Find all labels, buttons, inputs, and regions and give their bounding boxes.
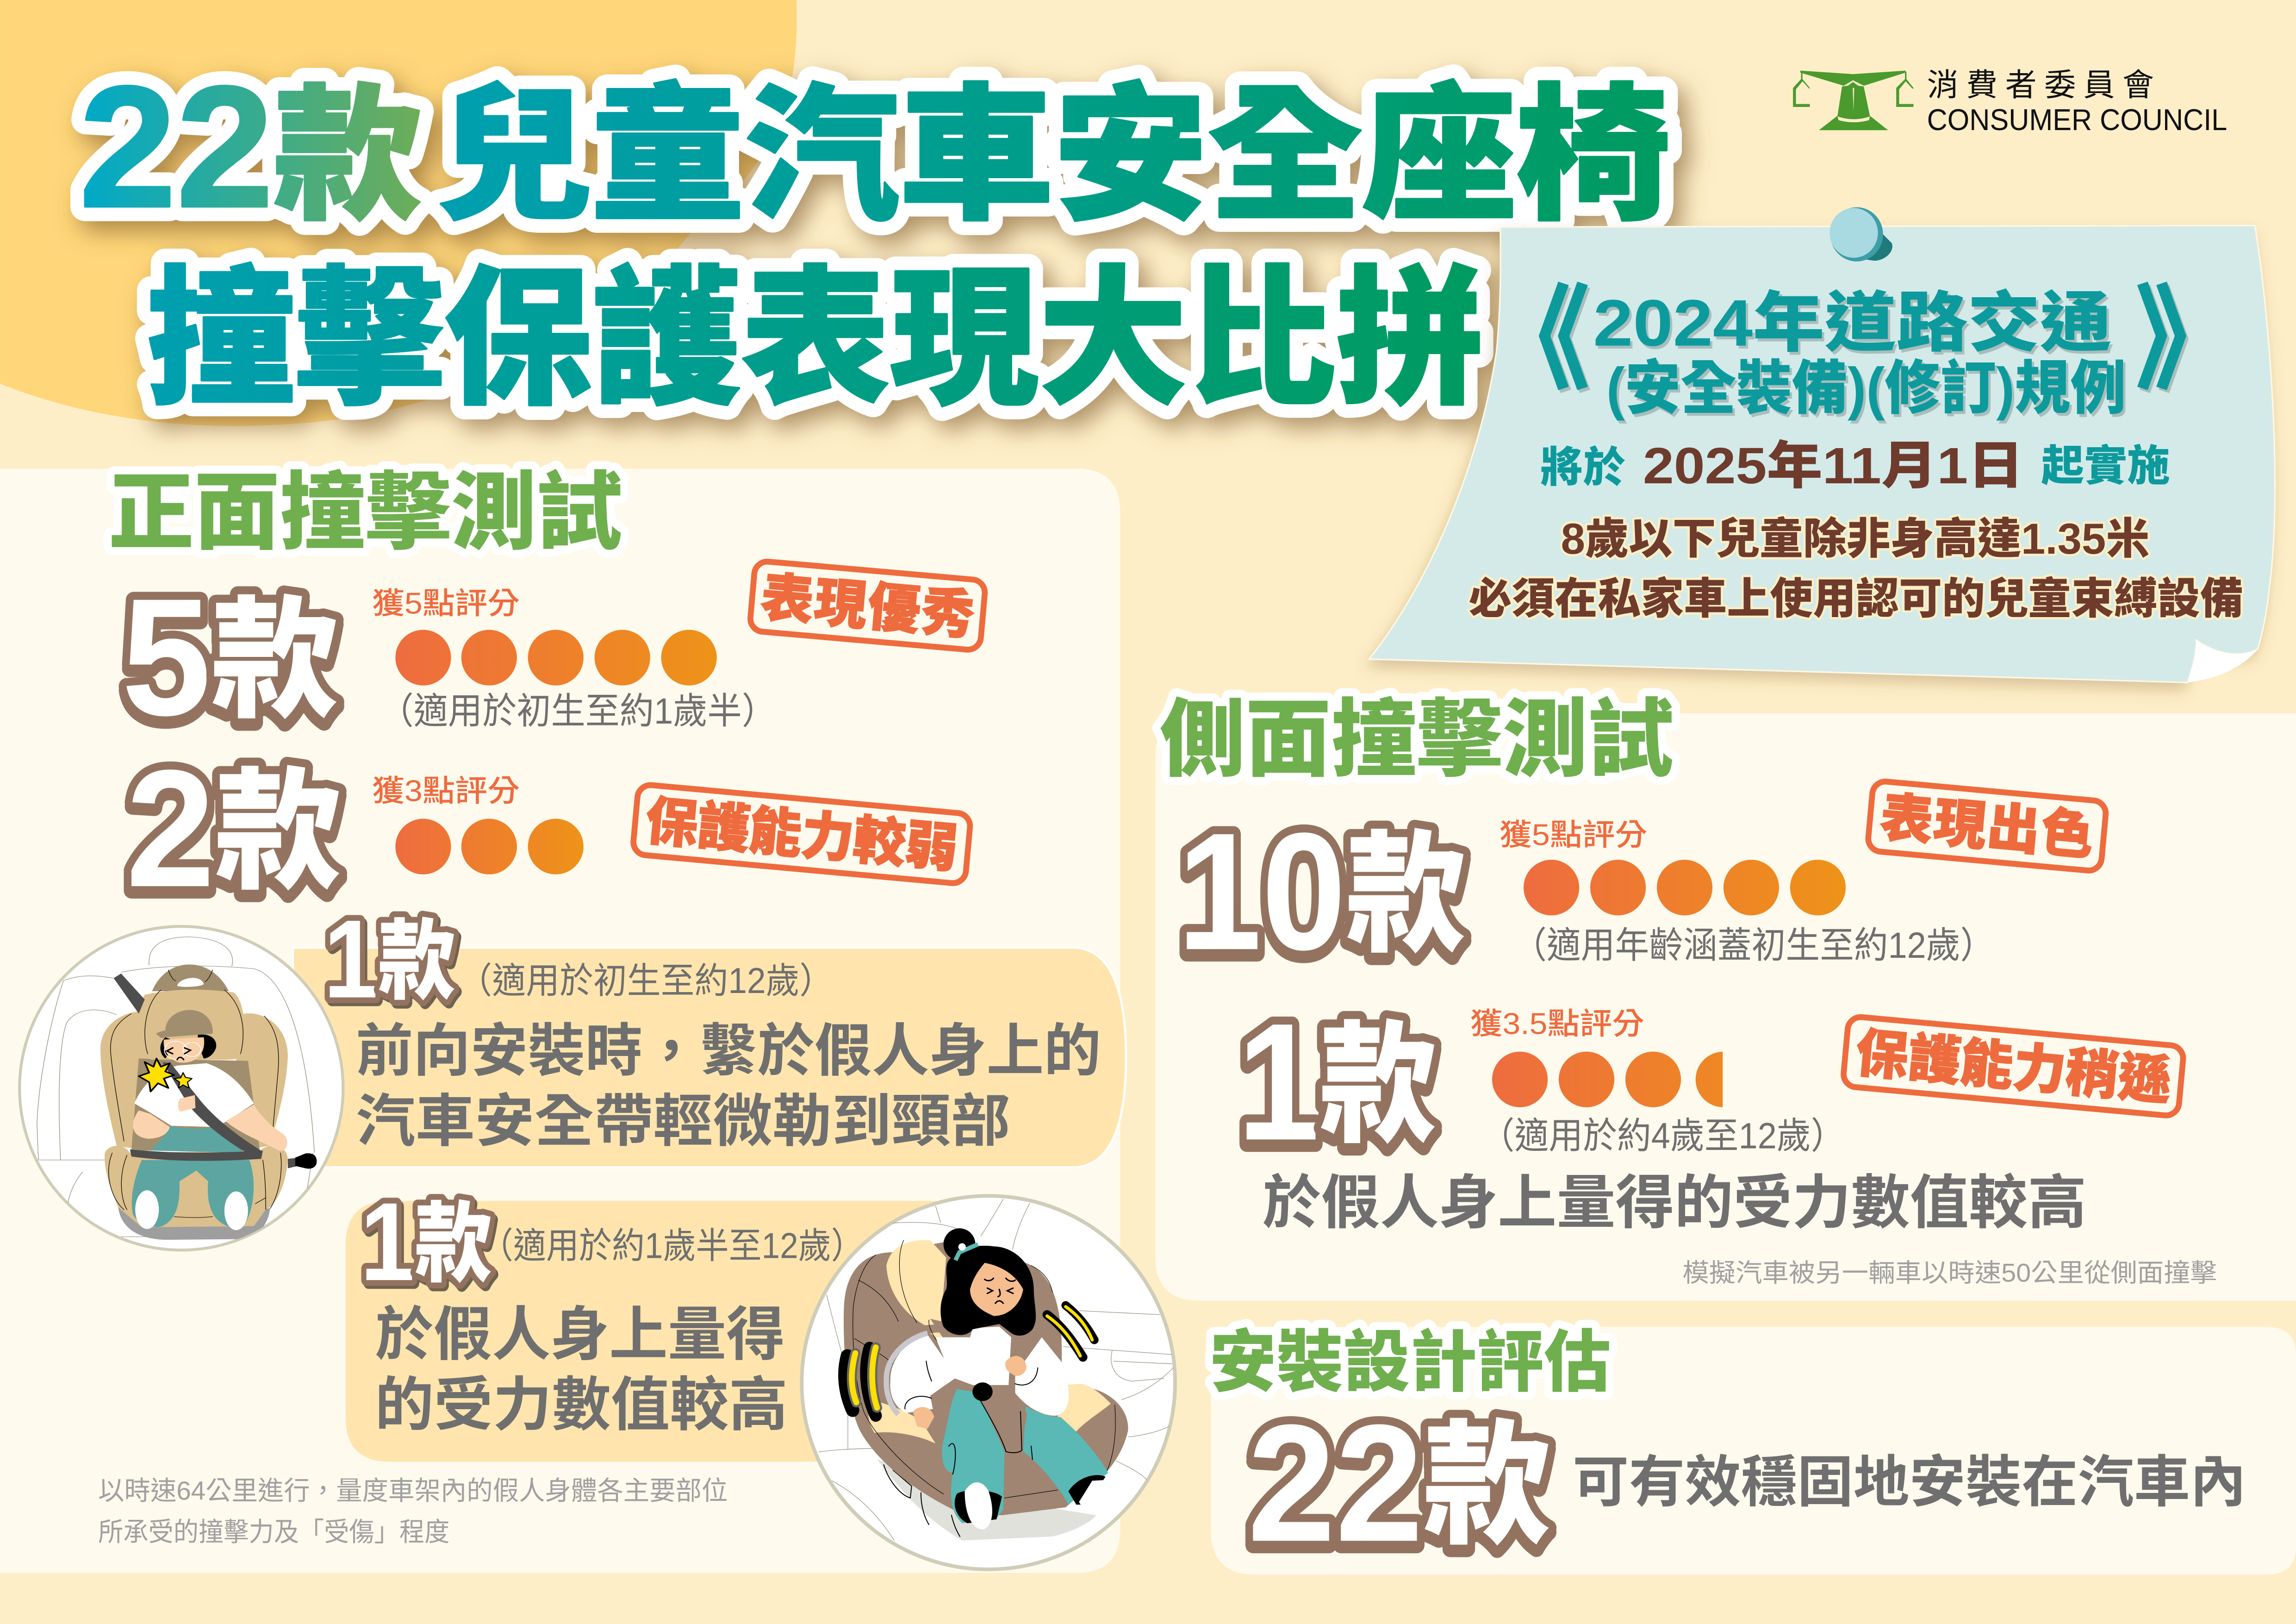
car seat outline	[37, 937, 314, 1237]
hands	[1005, 1356, 1027, 1376]
age range 1.5-12y: （適用於約1歲半至12歲）	[480, 1226, 864, 1266]
stamp: excellent: 表現優秀	[759, 568, 977, 645]
harness lower	[978, 1385, 1027, 1453]
stamp: slightly inferior: 保護能力稍遜	[1853, 1024, 2173, 1111]
effective date line: 2025年11月1日	[1643, 437, 2023, 494]
title white outline and shadow: 22款	[79, 50, 422, 244]
rating dots 3	[395, 819, 584, 874]
seat shell	[844, 1242, 1128, 1515]
grey shadow	[886, 1333, 927, 1414]
footnote: frontal test	[98, 1476, 728, 1547]
panel: regulation note	[1369, 207, 2275, 682]
rating dots 3.5	[1492, 1052, 1751, 1107]
callout band: force reading	[346, 1201, 966, 1462]
count: 5 models: 款	[211, 587, 338, 734]
stamp: weaker protection: 保護能力較弱	[643, 792, 960, 879]
title white outline and shadow	[79, 50, 1671, 423]
logo chinese name: 消費者委員會	[1927, 68, 2154, 103]
illustration circle	[802, 1196, 1175, 1569]
shoulder belt	[114, 974, 145, 1014]
count: 10 models: 款	[1346, 821, 1466, 968]
count: 1 model front-facing: 1	[324, 897, 378, 1021]
footnote: frontal test: 以時速64公里進行，量度車架內的假人身體各主要部位	[98, 1476, 728, 1506]
illustration circle	[19, 926, 343, 1250]
yellow side panels	[868, 1401, 935, 1443]
rating dots 5	[395, 630, 717, 686]
belt finding text: 前向安裝時，繫於假人身上的	[356, 1019, 1101, 1083]
score label 3.5: 獲3.5點評分	[1470, 1007, 1644, 1041]
face	[970, 1263, 1023, 1316]
effective date line	[1540, 437, 2170, 494]
count: 22 models: 22	[1248, 1390, 1423, 1576]
impact marks	[845, 1305, 1095, 1416]
panel: side impact background	[1155, 713, 2296, 1300]
panel: side impact test	[1160, 692, 2217, 1287]
trousers	[150, 1126, 245, 1153]
stamp: outstanding: 表現出色	[1878, 788, 2096, 866]
regulation name line two: (安全裝備)(修訂)規例	[1606, 356, 2126, 421]
hair	[160, 1035, 216, 1058]
belt finding text: 汽車安全帶輕微勒到頸部	[356, 1090, 1010, 1154]
impact stars	[139, 1058, 174, 1092]
title line two: 撞擊保護表現大比拼	[146, 256, 1485, 423]
title line one	[79, 50, 1671, 244]
illustration: child in reclined seat	[802, 1196, 1175, 1569]
force finding text: 於假人身上量得	[375, 1301, 785, 1367]
hair	[940, 1246, 1036, 1336]
note curled corner	[2188, 640, 2258, 682]
count: 5 models: 5	[122, 564, 211, 750]
force finding text	[375, 1301, 788, 1437]
note opening bracket: 《	[1485, 276, 1590, 404]
floor shadow	[877, 1460, 1096, 1541]
callout band: belt near neck	[293, 948, 1126, 1168]
buckle	[288, 1158, 298, 1168]
title white outline and shadow: 兒童汽車安全座椅	[436, 75, 1671, 238]
heading: frontal: 正面撞擊測試	[108, 465, 622, 560]
chest clip	[972, 1382, 993, 1401]
panel: frontal impact test	[19, 465, 1175, 1569]
count: 22 models: 款	[1423, 1410, 1551, 1561]
effective date line: 起實施	[2041, 443, 2170, 490]
seat base	[118, 1207, 270, 1240]
title line one: 兒童汽車安全座椅	[436, 75, 1671, 238]
age range 5: （適用於初生至約1歲半）	[380, 690, 776, 731]
count: 1 model 1.5-12y: 款	[415, 1195, 492, 1293]
seat stitching	[853, 1240, 1115, 1498]
logo english name: CONSUMER COUNCIL	[1927, 103, 2227, 137]
seat details	[109, 970, 281, 1218]
installation finding text: 可有效穩固地安裝在汽車內	[1573, 1451, 2246, 1513]
side finding text: 於假人身上量得的受力數值較高	[1262, 1170, 2086, 1236]
heading: side: 側面撞擊測試	[1160, 692, 1674, 787]
main title	[79, 50, 1671, 423]
score label 5: 獲5點評分	[372, 587, 520, 620]
rating dots 5 side	[1524, 860, 1846, 915]
footnote: frontal test: 所承受的撞擊力及「受傷」程度	[98, 1517, 449, 1547]
note closing bracket: 》	[2135, 276, 2240, 404]
seat legs	[884, 1465, 960, 1537]
face expression	[985, 1278, 1015, 1303]
footnote: side test: 模擬汽車被另一輛車以時速50公里從側面撞擊	[1682, 1258, 2217, 1287]
decorative orange blob	[0, 0, 797, 426]
title white outline and shadow: 撞擊保護表現大比拼	[146, 256, 1485, 423]
logo: consumer council	[1793, 68, 2227, 137]
panel: installation background	[1211, 1327, 2296, 1574]
age range 1 model side: （適用於約4歲至12歲）	[1481, 1115, 1845, 1156]
shoes	[135, 1190, 159, 1229]
title line one: 22款	[79, 50, 422, 244]
requirement line two: 必須在私家車上使用認可的兒童束縛設備	[1468, 575, 2243, 623]
cuffs	[905, 1396, 932, 1409]
note paper	[1369, 225, 2275, 682]
trousers	[942, 1389, 1005, 1523]
panel: frontal impact background	[0, 468, 1120, 1573]
yellow headrest	[886, 1240, 946, 1325]
score label 5 side: 獲5點評分	[1500, 818, 1647, 852]
requirement line one: 8歲以下兒童除非身高達1.35米	[1561, 515, 2150, 563]
count: 1 model side: 款	[1319, 1012, 1437, 1159]
icon: scales	[1793, 70, 1914, 130]
force finding text: 的受力數值較高	[375, 1372, 788, 1437]
age range front-facing: （適用於初生至約12歲）	[458, 961, 833, 1001]
diagonal belt	[162, 1062, 263, 1159]
hand	[178, 1095, 195, 1112]
count: 10 models: 10	[1177, 798, 1346, 985]
lap belt	[130, 1149, 263, 1161]
face	[164, 1037, 204, 1062]
count: 2 models: 2	[126, 735, 215, 922]
count: 1 model front-facing: 款	[378, 912, 455, 1011]
sweater	[935, 1327, 1011, 1385]
body harness	[930, 1318, 1027, 1453]
heading: installation: 安裝設計評估	[1209, 1324, 1611, 1400]
belt finding text	[356, 1019, 1101, 1154]
cap	[165, 1010, 213, 1037]
car interior lines	[819, 1199, 1173, 1541]
panel: installation assessment	[1209, 1324, 2246, 1576]
shirt	[134, 1063, 254, 1127]
illustration: child in forward-facing seat	[19, 926, 343, 1250]
icon: pin	[1829, 207, 1892, 262]
count: 1 model 1.5-12y: 1	[360, 1179, 415, 1304]
effective date line: 將於	[1540, 444, 1625, 491]
hair bun	[944, 1228, 975, 1260]
glasses and expression	[164, 1041, 201, 1059]
regulation name line one: 2024年道路交通	[1593, 287, 2111, 360]
count: 2 models: 款	[215, 758, 341, 906]
arms	[133, 1111, 170, 1139]
shoes	[955, 1490, 1002, 1523]
age range 10 models: （適用年齡涵蓋初生至約12歲）	[1512, 924, 1994, 966]
seat body	[152, 964, 229, 991]
score label 3: 獲3點評分	[372, 774, 520, 808]
count: 1 model side: 1	[1237, 988, 1319, 1175]
